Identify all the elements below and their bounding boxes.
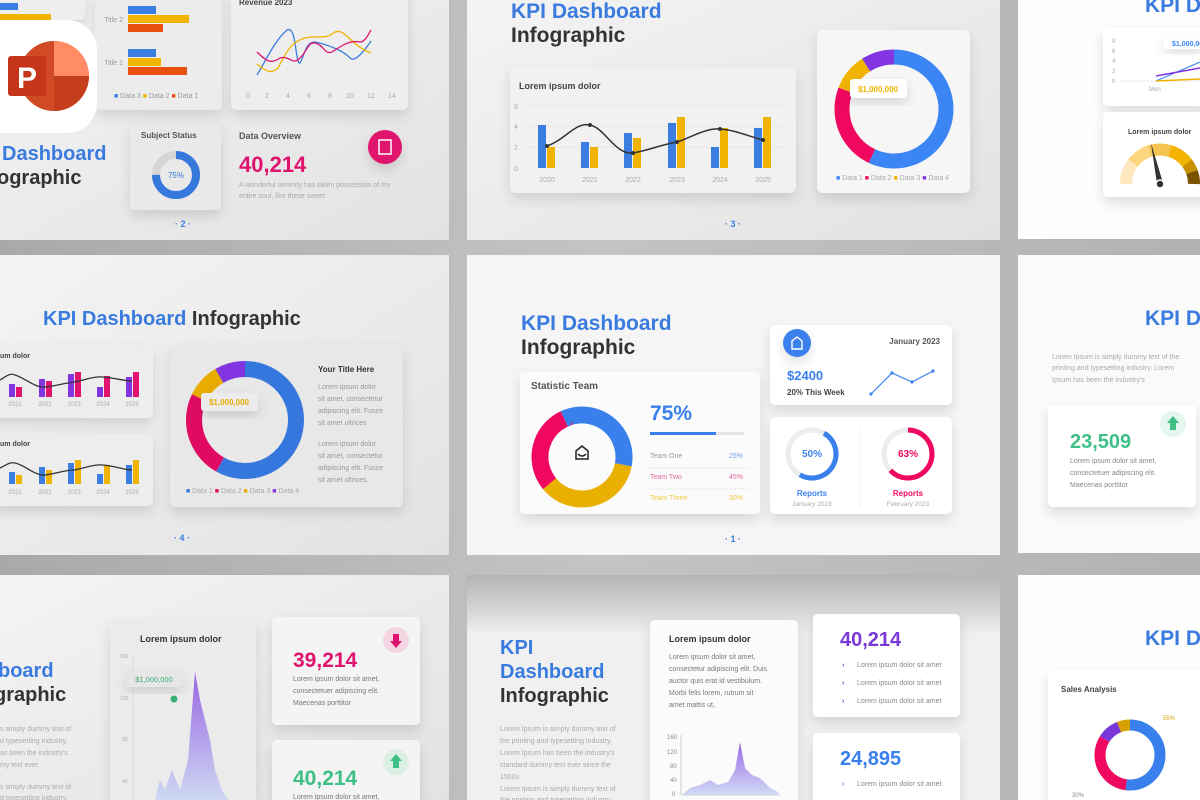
card: chart 2: 2025 — [125, 490, 139, 496]
card: revenue line chart: 14 — [388, 93, 396, 100]
title: slide 2: Dashboard — [2, 143, 106, 165]
card: line chart: 2 — [1112, 69, 1116, 75]
card: line chart — [1103, 28, 1200, 106]
card: lorem chart: Lorem ipsum dolor — [669, 634, 751, 644]
card: lorem chart: 40 — [670, 778, 677, 784]
card: chart 1: 2021 — [8, 402, 22, 408]
card: reports: February 2023 — [887, 501, 930, 508]
slide 3 top-middle — [467, 0, 1000, 240]
title: bottom-middle — [500, 637, 609, 707]
card: horizontal bar chart: ■ Data 3 ■ Data 2 ■ Data 1 — [114, 93, 198, 100]
card: revenue line chart: 8 — [328, 93, 332, 100]
card: 40,214 purple list: › — [842, 680, 845, 687]
text: data overview: Data Overview — [239, 131, 302, 141]
text block — [1052, 354, 1179, 384]
card: donut chart — [817, 30, 970, 193]
card: bar+line chart: 6 — [514, 104, 518, 111]
card: sales analysis: 30% — [1072, 793, 1085, 799]
title: bottom-right: KPI D — [1145, 627, 1200, 650]
card: chart 1: um dolor — [0, 353, 30, 360]
card: area chart: $1,000,000 — [135, 675, 173, 684]
slide top-right — [1018, 0, 1200, 239]
card: donut chart: $1,000,000 — [858, 85, 899, 94]
card: chart 2 — [0, 433, 153, 506]
text block bottom-middle: Lorem Ipsum has been the industry's — [500, 750, 615, 757]
card: bar+line chart: 2022 — [625, 177, 641, 184]
card: statistic team: Statistic Team — [531, 381, 598, 392]
card: bar+line chart — [510, 67, 796, 193]
card: donut with text: ■ Data 1 ■ Data 2 ■ Data 3 ■ Data 4 — [186, 488, 299, 495]
icon: pink building — [368, 130, 402, 164]
card: 40,214 purple list: Lorem ipsum dolor sit amet — [857, 680, 941, 687]
card: 40,214 green — [272, 740, 420, 800]
icon: powerpoint logo — [0, 20, 97, 133]
card: 40,214 purple list: › — [842, 698, 845, 705]
card: lorem chart: 160 — [667, 735, 678, 741]
page number 1: · 1 · — [725, 534, 741, 544]
card: revenue line chart: 4 — [286, 93, 290, 100]
card: revenue line chart: 12 — [367, 93, 375, 100]
card: reports: January 2023 — [792, 501, 832, 508]
card: reports: 50% — [802, 449, 822, 460]
title: slide 1: KPI Dashboard — [521, 312, 672, 335]
card: lorem chart: consectetur adipiscing elit. Duis — [669, 666, 768, 673]
card: donut with text: adipiscing elit. Fusce — [318, 465, 383, 472]
text: data overview: entire soul, like these sweet — [239, 193, 325, 200]
page number 4: · 4 · — [174, 533, 190, 543]
title: slide middle-right: KPI D — [1145, 307, 1200, 330]
text block bottom-middle: 1500s — [500, 774, 520, 781]
card: 23,509: consectetuer adipiscing elit. — [1070, 470, 1156, 477]
card: reports: Reports — [797, 489, 828, 498]
text block: printing and typesetting industry. Lorem — [1052, 365, 1174, 372]
card: 24,895: 24,895 — [840, 748, 901, 770]
card: 23,509: 23,509 — [1070, 431, 1131, 453]
card: line chart: 8 — [1112, 39, 1116, 45]
card: horizontal bar chart: Title 2 — [104, 17, 123, 24]
card: 39,214: Maecenas porttitor — [293, 700, 352, 707]
card: chart 1: 2025 — [125, 402, 139, 408]
card: partial bar chart far left — [0, 0, 85, 20]
page number 2: · 2 · — [175, 219, 191, 229]
card: $2400: $2400 — [787, 368, 823, 383]
card: statistic team: Team Three — [650, 495, 687, 502]
card: 24,895: › — [842, 781, 845, 788]
card: bar+line chart: 2023 — [669, 177, 685, 184]
card: 40,214 purple list: › — [842, 662, 845, 669]
title: slide 4: KPI Dashboard Infographic — [43, 308, 301, 330]
card: donut with text: sit amet, consectetur — [318, 396, 383, 403]
title: bottom-left — [0, 660, 66, 706]
card: chart 2: 2024 — [96, 490, 110, 496]
card: revenue line chart: 10 — [346, 93, 354, 100]
card: donut with text: adipiscing elit. Fusce — [318, 408, 383, 415]
text block bottom-middle: Lorem Ipsum is simply dummy text of — [500, 786, 616, 793]
card: bar+line chart: 2025 — [755, 177, 771, 184]
card: chart 2: 2022 — [38, 490, 52, 496]
card: donut with text: sit amet, consectetur — [318, 453, 383, 460]
card: area chart: 80 — [122, 737, 128, 743]
card: donut with text: Your Title Here — [318, 365, 375, 374]
text block bottom-left: s simply dummy text of — [0, 784, 71, 791]
text block bottom-left: my text ever — [0, 762, 39, 769]
card: 23,509: Lorem ipsum dolor sit amet, — [1070, 458, 1156, 465]
card: horizontal bar chart — [95, 0, 222, 110]
card: donut with text — [170, 345, 403, 507]
card: horizontal bar chart: Title 1 — [104, 60, 123, 67]
card: donut with text: $1,000,000 — [209, 398, 250, 407]
card: 40,214 green: 40,214 — [293, 767, 358, 790]
card: bar+line chart: 2021 — [582, 177, 598, 184]
card: 40,214 purple list: Lorem ipsum dolor sit amet — [857, 698, 941, 705]
card: bar+line chart: 4 — [514, 124, 518, 131]
card: 39,214: Lorem ipsum dolor sit amet, — [293, 676, 379, 683]
text block bottom-left: d typesetting industry. — [0, 738, 68, 745]
card: lorem chart: amet mattis ut, — [669, 702, 715, 709]
card: line chart: 0 — [1112, 79, 1116, 85]
text block bottom-left — [0, 726, 71, 800]
card: area chart — [110, 620, 256, 800]
card: donut with text: sit amet ultrices — [318, 477, 367, 484]
text block bottom-left: as been the industry's — [0, 750, 68, 757]
card: statistic team: Team One — [650, 453, 682, 460]
title: slide 3: Infographic — [511, 24, 626, 47]
text: data overview: 40,214 — [239, 152, 307, 177]
card: bar+line chart: 2024 — [712, 177, 728, 184]
card: $2400: January 2023 — [889, 337, 941, 346]
card: statistic team: 45% — [729, 474, 743, 481]
slide bottom-middle — [467, 575, 1000, 800]
card: chart 1 — [0, 345, 153, 418]
slide 2 top-left — [0, 0, 449, 240]
card: area chart: 120 — [120, 696, 129, 702]
card: lorem chart: 0 — [672, 792, 676, 798]
card: donut with text: Lorem ipsum dolor — [318, 441, 377, 448]
card: revenue line chart: 0 — [246, 93, 250, 100]
card: subject status — [130, 123, 221, 210]
card: line chart: Mon — [1149, 87, 1161, 93]
slide 1 center — [467, 255, 1000, 555]
card: area chart: 160 — [120, 654, 129, 660]
title: slide 1: Infographic — [521, 336, 636, 359]
title: bottom-middle: KPI — [500, 637, 533, 659]
card: area chart: 40 — [122, 779, 128, 785]
slide bottom-left — [0, 575, 449, 800]
card: revenue line chart: 6 — [307, 93, 311, 100]
card: 23,509: Maecenas porttitor — [1070, 482, 1129, 489]
card: chart 2: 2021 — [8, 490, 22, 496]
card: area chart: Lorem ipsum dolor — [140, 634, 222, 644]
card: statistic team: 75% — [650, 402, 692, 425]
card: chart 2: um dolor — [0, 441, 30, 448]
card: 39,214: 39,214 — [293, 649, 358, 672]
card: chart 1: 2024 — [96, 402, 110, 408]
card: bar+line chart: 0 — [514, 166, 518, 173]
text block bottom-middle: Lorem Ipsum is simply dummy text of — [500, 726, 616, 733]
text block bottom-middle — [500, 726, 616, 800]
card: chart 1: 2022 — [38, 402, 52, 408]
title: slide 3: KPI Dashboard — [511, 0, 662, 23]
text block bottom-middle: the printing and typesetting industry. — [500, 738, 612, 745]
text: data overview — [239, 131, 391, 200]
card: revenue line chart — [231, 0, 408, 110]
card: donut with text: Lorem ipsum dolor — [318, 384, 377, 391]
card: 24,895 — [813, 733, 960, 800]
card: line chart: 6 — [1112, 49, 1116, 55]
page number 3: · 3 · — [725, 219, 741, 229]
card: sales analysis — [1048, 670, 1200, 800]
card: chart 1: 2023 — [67, 402, 81, 408]
card: bar+line chart: 2020 — [539, 177, 555, 184]
text block: Lorem Ipsum is simply dummy text of the — [1052, 354, 1179, 361]
title: slide 1 — [521, 312, 672, 359]
card: lorem chart: 120 — [667, 750, 678, 756]
card: $2400: 20% This Week — [787, 388, 845, 397]
card: 23,509 — [1048, 405, 1196, 507]
card: lorem chart: Lorem ipsum dolor sit amet, — [669, 654, 755, 661]
text block bottom-middle: standard dummy text ever since the — [500, 762, 611, 769]
text block bottom-left: s simply dummy text of — [0, 726, 71, 733]
slide 4 middle-left — [0, 255, 449, 555]
card: revenue line chart: 2 — [265, 93, 269, 100]
card: sales analysis: Sales Analysis — [1061, 685, 1117, 694]
card: 39,214 — [272, 617, 420, 725]
text: data overview: A wonderful serenity has taken possession of my — [239, 182, 391, 189]
card: reports: 63% — [898, 449, 918, 460]
card: bar+line chart: Lorem ipsum dolor — [519, 81, 601, 91]
card: reports — [770, 417, 952, 514]
card: lorem chart: 80 — [670, 764, 677, 770]
card: subject status: 75% — [168, 171, 184, 180]
card: 24,895: Lorem ipsum dolor sit amet — [857, 781, 941, 788]
card: statistic team — [520, 372, 760, 514]
card: 40,214 purple list — [813, 614, 960, 717]
title: bottom-middle: Infographic — [500, 685, 609, 707]
text block: Ipsum has been the industry's — [1052, 377, 1145, 384]
card: statistic team: 30% — [729, 495, 743, 502]
card: lorem chart: auctor quis erat id vestibulum. — [669, 678, 762, 685]
title: bottom-middle: Dashboard — [500, 661, 604, 683]
title: slide 2 — [0, 143, 106, 189]
title: slide 3 — [511, 0, 662, 47]
card: 40,214 purple list: Lorem ipsum dolor sit amet — [857, 662, 941, 669]
card: donut chart: ■ Data 1 ■ Data 2 ■ Data 3 ■ Data 4 — [836, 175, 949, 182]
card: lorem chart — [650, 620, 798, 800]
card: subject status: Subject Status — [141, 131, 197, 140]
card: reports: Reports — [893, 489, 924, 498]
card: $2400 — [770, 325, 952, 405]
icon: powerpoint logo: P — [17, 62, 37, 95]
card: lorem chart: Morbi felis lorem, rutrum sit — [669, 690, 753, 697]
card: line chart: 4 — [1112, 59, 1116, 65]
card: 40,214 purple list: 40,214 — [840, 629, 902, 651]
slide bottom-right — [1018, 575, 1200, 800]
slide middle-right — [1018, 255, 1200, 553]
card: donut with text: sit amet ultrices — [318, 420, 367, 427]
card: bar+line chart: 2 — [514, 145, 518, 152]
icon: home — [576, 446, 588, 459]
card: gauge — [1103, 112, 1200, 197]
card: sales analysis: 55% — [1163, 716, 1176, 722]
card: 39,214: consectetuer adipiscing elit. — [293, 688, 379, 695]
card: chart 2: 2023 — [67, 490, 81, 496]
card: gauge: Lorem ipsum dolor — [1128, 129, 1192, 136]
card: statistic team: 25% — [729, 453, 743, 460]
card: statistic team: Team Two — [650, 474, 682, 481]
